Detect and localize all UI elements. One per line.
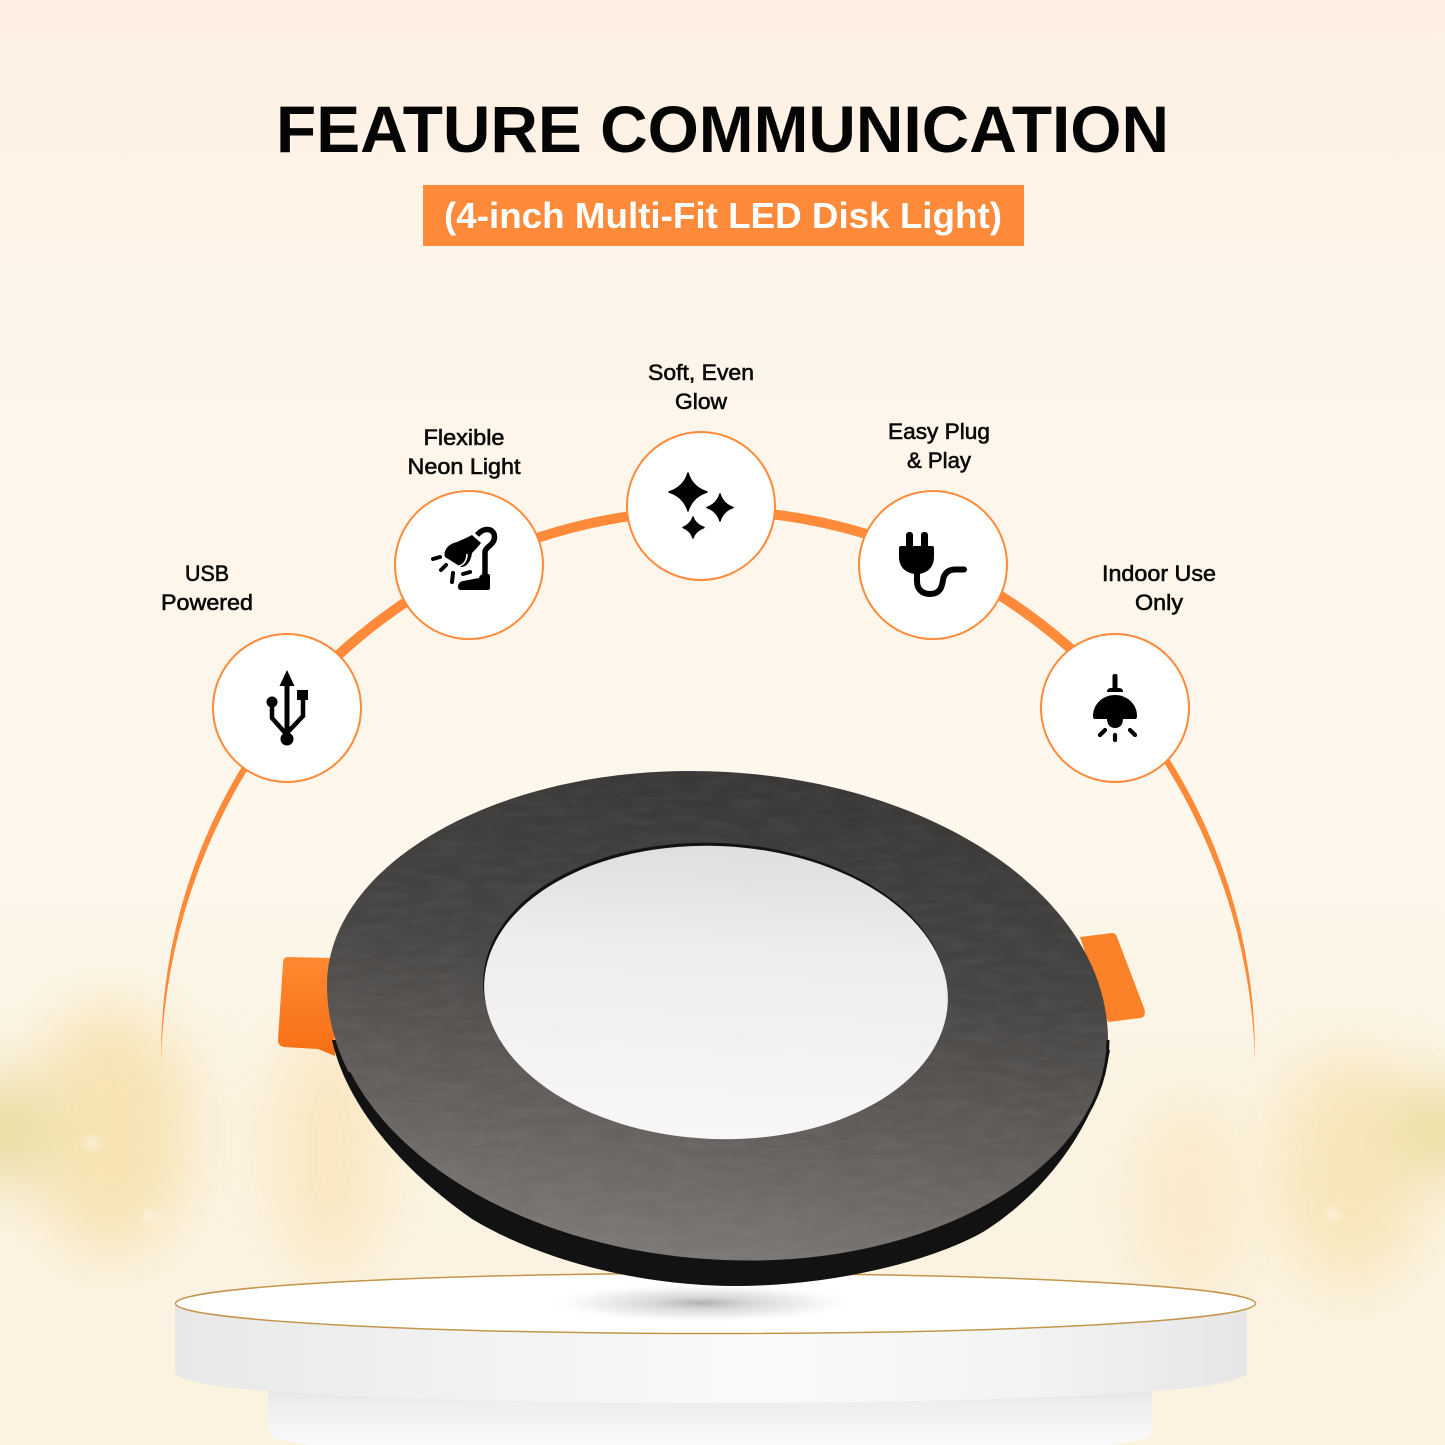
feature: Indoor Use Only [1041,561,1216,782]
contact shadow [542,1283,862,1323]
background [0,975,1445,1445]
feature: Easy Plug & Play: Easy Plug [888,419,990,444]
feature: Flexible Neon Light: Flexible [424,425,504,450]
right orange clip [1080,933,1145,1022]
feature: USB Powered: USB [185,561,229,586]
feature: Flexible Neon Light: Neon Light [408,454,520,479]
title: FEATURE COMMUNICATION [276,92,1169,166]
product: LED disk light [278,771,1145,1286]
feature: USB Powered: Powered [161,590,253,615]
icon: pendant lamp [1093,674,1137,740]
feature: USB Powered [161,561,361,782]
upper tier side [175,1303,1247,1403]
podium [175,1274,1256,1445]
lens edge [477,833,953,1145]
subtitle banner: (4-inch Multi-Fit LED Disk Light) [444,195,1002,236]
feature: Indoor Use Only: Only [1135,590,1183,615]
feature: Soft, Even Glow: Glow [675,389,727,414]
feature: Easy Plug & Play [859,419,1007,639]
face plate [327,771,1108,1262]
black rim [332,1040,1110,1286]
orange arc connector [161,510,1255,1060]
feature: Easy Plug & Play: & Play [907,448,971,473]
feature: Flexible Neon Light [395,425,543,639]
lens [478,836,954,1149]
left orange clip [278,957,335,1056]
face edge line [349,1040,1108,1262]
subtitle banner [423,185,1024,246]
feature: Soft, Even Glow [627,360,775,580]
feature: Soft, Even Glow: Soft, Even [648,360,754,385]
brushed metal texture [327,771,1108,1262]
icon: sparkles [669,473,733,538]
feature: Indoor Use Only: Indoor Use [1102,561,1216,586]
icon: plug [899,532,964,594]
top surface [176,1274,1256,1334]
icon: desk lamp [433,529,494,590]
lower tier [268,1380,1152,1445]
icon: USB [266,670,308,746]
